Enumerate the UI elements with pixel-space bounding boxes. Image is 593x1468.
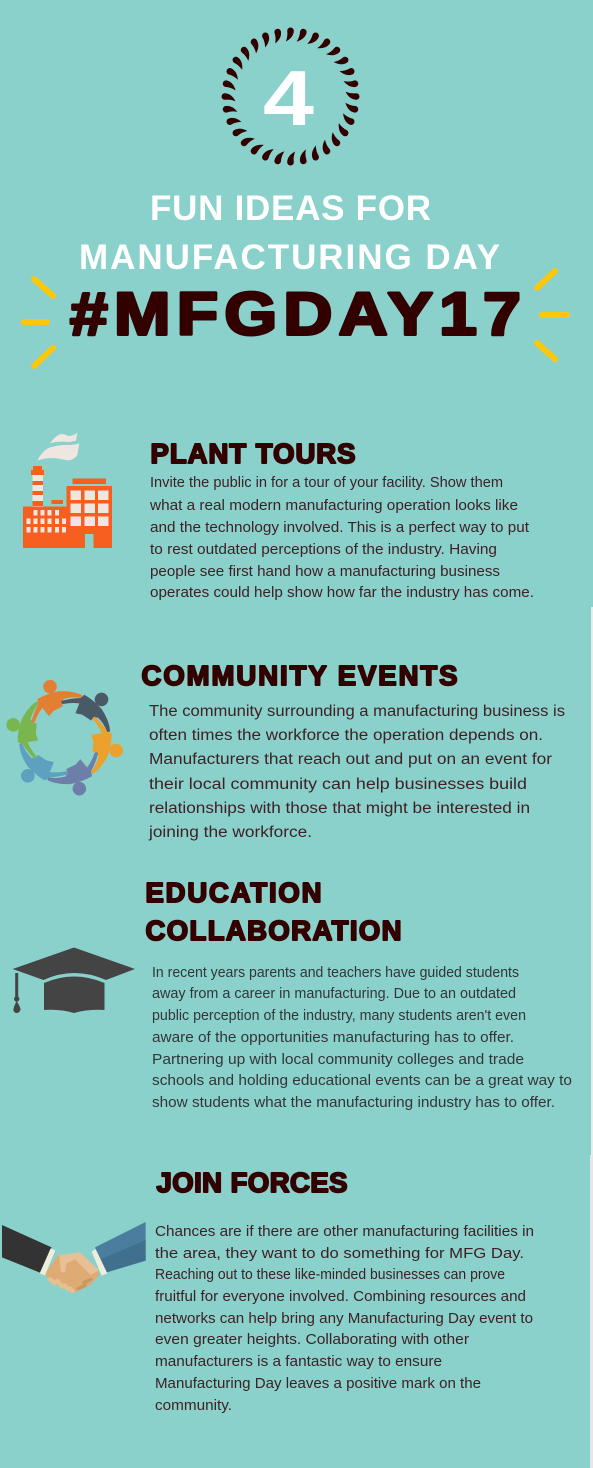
heading: community events: COMMUNITY EVENTS: [142, 660, 458, 691]
text: plant tours: to rest outdated perceptions of the industry. Having: [150, 542, 497, 558]
text: education collaboration: public perception of the industry, many students aren't even: [152, 1008, 526, 1024]
text: join forces: even greater heights. Collaborating with other: [155, 1332, 469, 1348]
text: plant tours: and the technology involved. This is a perfect way to put: [150, 520, 529, 536]
icon: ring of drops with number 4: 4: [263, 54, 314, 142]
hashtag: #MFGDAY17: [70, 280, 521, 348]
heading: join forces: JOIN FORCES: [156, 1167, 348, 1198]
text: education collaboration: In recent years parents and teachers have guided students: [152, 965, 519, 981]
text: join forces: Chances are if there are other manufacturing facilities in: [155, 1224, 534, 1240]
text: join forces: Reaching out to these like-minded businesses can prove: [155, 1267, 505, 1283]
text: community events: joining the workforce.: [148, 824, 312, 841]
heading: education collaboration: COLLABORATION: [146, 915, 402, 946]
text: join forces: [155, 1224, 534, 1414]
panel: plant tours: [23, 433, 534, 601]
text: plant tours: operates could help show how far the industry has come.: [150, 585, 534, 601]
text: education collaboration: schools and holding educational events can be a great way to: [152, 1073, 572, 1089]
text: community events: often times the workforce the operation depends on.: [149, 727, 543, 744]
text: education collaboration: aware of the opportunities manufacturing has to offer.: [152, 1030, 514, 1046]
title: FUN IDEAS FOR: [150, 189, 431, 228]
panel: join forces: [2, 1167, 534, 1414]
text: plant tours: people see first hand how a manufacturing business: [150, 564, 500, 580]
icon: circle of people: [0, 680, 131, 795]
text: join forces: networks can help bring any Manufacturing Day event to: [155, 1311, 533, 1327]
text: education collaboration: Partnering up with local community colleges and trade: [152, 1052, 524, 1068]
text: community events: [148, 703, 565, 841]
text: plant tours: [149, 475, 534, 601]
text: plant tours: Invite the public in for a tour of your facility. Show them: [150, 475, 503, 491]
icon: yellow burst rays: [24, 271, 567, 366]
title: MANUFACTURING DAY: [79, 238, 500, 277]
text: community events: their local community can help businesses build: [149, 776, 527, 793]
text: community events: The community surrounding a manufacturing business is: [149, 703, 565, 720]
text: education collaboration: show students what the manufacturing industry has to offer.: [152, 1095, 555, 1111]
heading: education collaboration: EDUCATION: [146, 877, 322, 908]
panel: community events: [0, 660, 565, 841]
text: join forces: the area, they want to do something for MFG Day.: [155, 1246, 524, 1262]
text: join forces: community.: [155, 1398, 232, 1414]
title: [79, 189, 500, 277]
heading: education collaboration: [146, 877, 402, 946]
text: join forces: fruitful for everyone involved. Combining resources and: [155, 1289, 526, 1305]
icon: graduation cap: [13, 948, 135, 1013]
text: community events: relationships with those that might be interested in: [149, 800, 530, 817]
panel: education collaboration: [13, 877, 572, 1111]
text: join forces: manufacturers is a fantastic way to ensure: [155, 1354, 442, 1370]
text: education collaboration: [152, 965, 572, 1111]
text: join forces: Manufacturing Day leaves a positive mark on the: [155, 1376, 481, 1392]
icon: handshake: [2, 1222, 146, 1293]
text: plant tours: what a real modern manufacturing operation looks like: [149, 498, 518, 514]
icon: ring of drops with number 4: [222, 27, 360, 165]
heading: plant tours: PLANT TOURS: [150, 438, 356, 469]
icon: factory: [23, 433, 112, 548]
text: community events: Manufacturers that reach out and put on an event for: [149, 751, 552, 768]
panel: header: [24, 27, 567, 366]
text: education collaboration: away from a career in manufacturing. Due to an outdated: [152, 986, 516, 1002]
